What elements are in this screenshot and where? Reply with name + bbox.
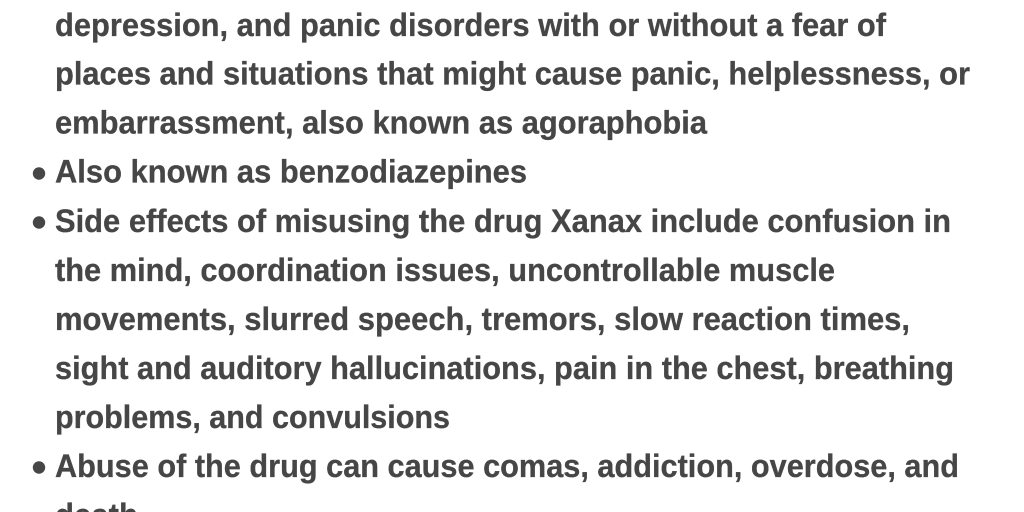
list item: side effects: the mind, coordination issues, uncontrollable muscle (55, 252, 835, 288)
list item: side effects: movements, slurred speech, tremors, slow reaction times, (55, 301, 910, 337)
list item: abuse risks: Abuse of the drug can cause comas, addiction, overdose, and (55, 448, 959, 484)
list item: side effects: Side effects of misusing the drug Xanax include confusion in (55, 203, 951, 239)
text block: continuation of uses bullet: depression, and panic disorders with or without a fear of (55, 7, 886, 43)
list item: side effects (33, 203, 954, 435)
text block: continuation of uses bullet (55, 7, 970, 140)
list item: abuse risks (33, 448, 959, 512)
list item: also known as: Also known as benzodiazepines (55, 154, 527, 190)
text block: continuation of uses bullet: embarrassment, also known as agoraphobia (55, 104, 708, 140)
list item: side effects: problems, and convulsions (55, 399, 450, 435)
list item: side effects: sight and auditory hallucinations, pain in the chest, breathing (55, 350, 954, 386)
text block: continuation of uses bullet: places and situations that might cause panic, helplessness, or (55, 56, 970, 92)
